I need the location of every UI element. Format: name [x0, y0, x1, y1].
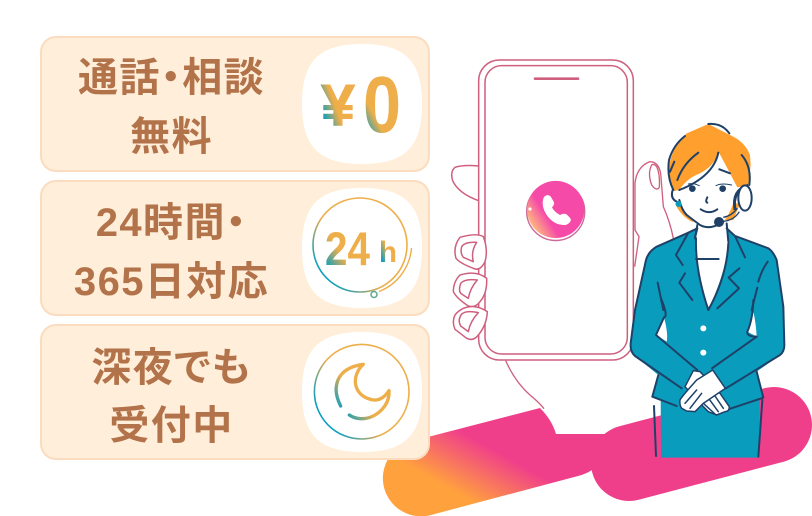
hand lower wrist line: [506, 361, 544, 409]
card: free of charge: [41, 37, 429, 171]
clasped hands: [680, 370, 729, 415]
headset: [714, 185, 752, 227]
phone outer body: [479, 60, 633, 360]
thumb nail: [649, 164, 659, 189]
icon: 24h clock: 24: [325, 222, 370, 275]
card: late night: [41, 325, 429, 459]
card: 24 hours: [41, 181, 429, 315]
eyes: [689, 185, 726, 192]
heading: free calls: 通話・相談: [78, 56, 265, 100]
heading: free calls: 無料: [130, 115, 213, 159]
icon: moon: [302, 332, 422, 452]
icon: zero yen: [302, 44, 422, 164]
shirt and neck: [695, 223, 728, 310]
smartphone held in hand: [452, 60, 633, 409]
icon: 24h clock: [302, 188, 422, 308]
fingers: [453, 235, 487, 339]
face: [679, 153, 737, 227]
jacket outlines: [631, 228, 784, 457]
heading: open all year: 24時間・: [96, 201, 247, 245]
operator woman with headset: [631, 124, 784, 458]
icon: phone handset: [543, 196, 570, 224]
earring: [676, 201, 682, 207]
heading: late night service: 受付中: [109, 404, 234, 448]
hair: [669, 124, 751, 191]
heading: late night service: 深夜でも: [91, 346, 252, 390]
phone speaker: [535, 75, 578, 83]
call button: [527, 181, 585, 240]
skirt: [661, 397, 760, 458]
back hair: [675, 203, 740, 222]
icon: zero yen: 0: [363, 60, 401, 149]
jacket: [631, 228, 784, 409]
pink swoosh background: [383, 408, 774, 516]
gaps between arms and torso: [656, 312, 757, 342]
heading: open all year: 365日対応: [74, 260, 269, 304]
buttons: [700, 325, 706, 356]
phone screen: [485, 66, 627, 354]
thumb behind phone: [635, 162, 673, 267]
face features and hair lines: [668, 124, 750, 242]
icon: 24h clock: h: [379, 236, 397, 269]
icon: zero yen: ¥: [321, 73, 355, 138]
hand back finger: [452, 166, 479, 201]
